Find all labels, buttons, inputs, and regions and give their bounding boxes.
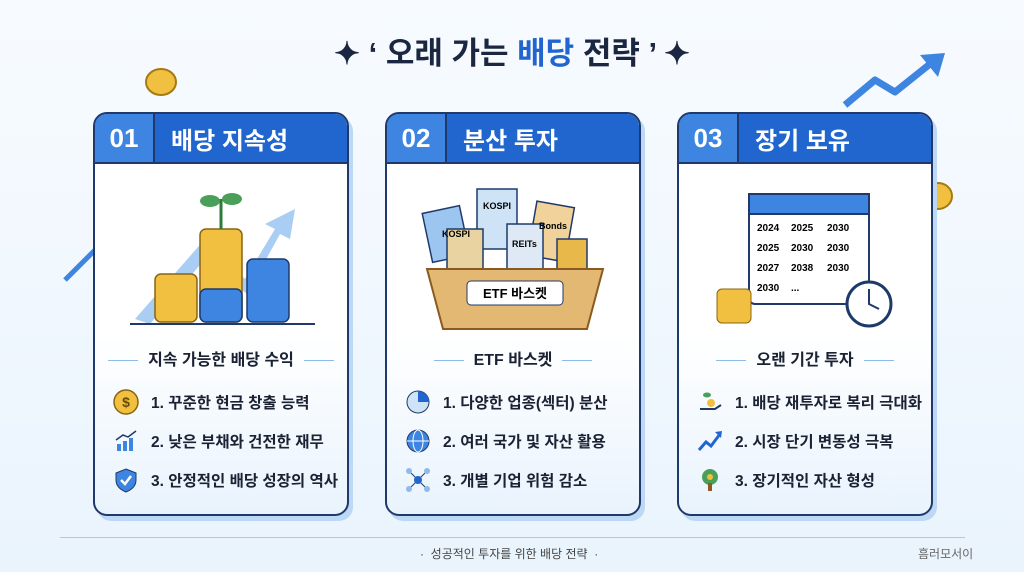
header 2 (387, 114, 639, 164)
list 2 (406, 390, 608, 492)
card 2 (385, 112, 641, 516)
illustration: calendar and clock: 2030 (827, 263, 850, 274)
illustration: calendar and clock (716, 193, 892, 328)
illustration: ETF basket: ETF 바스켓 (483, 286, 547, 301)
illustration: calendar and clock: 2024 (757, 223, 780, 234)
list 3: 3. 장기적인 자산 형성 (735, 472, 875, 490)
footer caption: · 성공적인 투자를 위한 배당 전략 · (420, 547, 598, 561)
list 1: 3. 안정적인 배당 성장의 역사 (151, 472, 338, 490)
decoration: coin right (937, 182, 953, 210)
list 1 (113, 389, 338, 492)
list 2: 3. 개별 기업 위험 감소 (443, 472, 587, 490)
list 1: 1. 꾸준한 현금 창출 능력 (151, 394, 310, 412)
list 2: 2. 여러 국가 및 자산 활용 (443, 434, 606, 450)
title: ✦ ‘ 오래 가는 배당 전략 ’ ✦ (334, 36, 690, 71)
header 1: 배당 지속성 (171, 128, 288, 154)
card 3 (677, 112, 933, 516)
illustration: calendar and clock: 2027 (757, 263, 780, 274)
list 1: 2. 낮은 부채와 건전한 재무 (151, 434, 324, 450)
footer line (60, 537, 965, 538)
illustration: calendar and clock: 2025 (757, 243, 780, 254)
illustration: ETF basket: KOSPI (442, 229, 470, 239)
list 3 (698, 392, 922, 491)
subtitle 2: ETF 바스켓 (474, 352, 552, 369)
illustration: calendar and clock: ... (791, 283, 800, 294)
header 2: 분산 투자 (463, 128, 558, 154)
illustration: ETF basket: REITs (512, 239, 537, 249)
illustration: ETF basket: Bonds (539, 221, 567, 231)
decoration: coin top left (145, 68, 177, 96)
decoration: arrow left (63, 248, 93, 282)
subtitle 1: 지속 가능한 배당 수익 (148, 352, 294, 369)
illustration: calendar and clock: 2030 (827, 243, 850, 254)
decoration: trend arrow top right (842, 53, 945, 108)
header 3 (679, 114, 931, 164)
list 1: $ (122, 394, 130, 410)
header 3: 03 (694, 122, 722, 152)
list 3: 2. 시장 단기 변동성 극복 (735, 434, 894, 450)
illustration: calendar and clock: 2030 (791, 243, 814, 254)
header 1 (95, 114, 347, 164)
illustration: ETF basket: KOSPI (483, 201, 511, 211)
illustration: calendar and clock: 2025 (791, 223, 814, 234)
illustration: ETF basket (421, 188, 604, 330)
subtitle 3: 오랜 기간 투자 (756, 352, 854, 369)
list 2: 1. 다양한 업종(섹터) 분산 (443, 394, 608, 412)
card 1 (93, 112, 349, 516)
illustration: coin stacks (130, 193, 315, 325)
illustration: calendar and clock: 2038 (791, 263, 814, 274)
header 2: 02 (402, 122, 430, 152)
illustration: calendar and clock: 2030 (757, 283, 780, 294)
list 3: 1. 배당 재투자로 복리 극대화 (735, 394, 922, 412)
illustration: calendar and clock: 2030 (827, 223, 850, 234)
header 1: 01 (110, 122, 138, 152)
header 3: 장기 보유 (755, 128, 850, 154)
footer author: 흠러모서이 (918, 547, 973, 561)
